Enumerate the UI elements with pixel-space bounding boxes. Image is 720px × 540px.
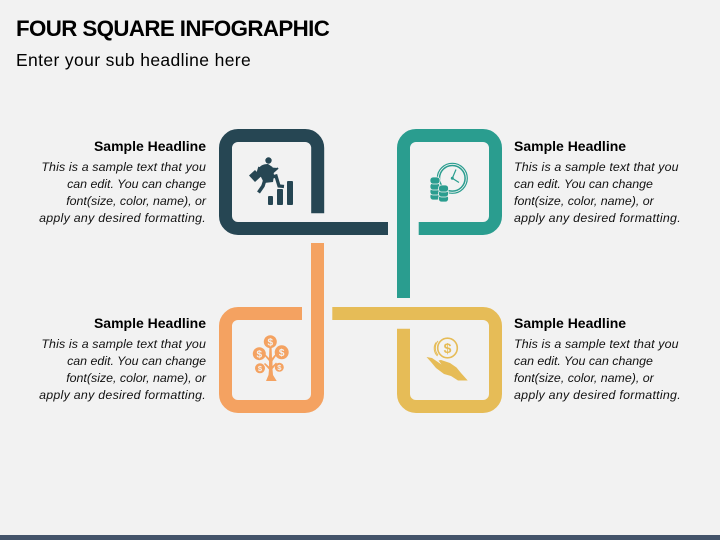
text block: bottom left: apply any desired formatting. xyxy=(39,388,206,402)
text block: bottom left: font(size, color, name), or xyxy=(66,370,206,384)
text block: bottom right: font(size, color, name), or xyxy=(514,370,654,384)
text block: bottom right: can edit. You can change xyxy=(514,354,653,368)
text block: bottom left: This is a sample text that you xyxy=(41,336,206,350)
text block: top right xyxy=(514,138,681,224)
panel: dark square outline xyxy=(226,136,388,228)
text block: top left: Sample Headline xyxy=(94,138,206,154)
text block: top right: apply any desired formatting. xyxy=(514,210,681,224)
icon: money tree: $ xyxy=(268,338,274,348)
text block: top left xyxy=(39,138,206,224)
text block: bottom left: Sample Headline xyxy=(94,315,206,331)
text block: bottom right: Sample Headline xyxy=(514,315,626,331)
text block: top left: This is a sample text that you xyxy=(41,160,206,174)
text block: bottom right: This is a sample text that you xyxy=(514,336,679,350)
icon: businessman climbing bars xyxy=(249,157,293,205)
text block: top right: font(size, color, name), or xyxy=(514,194,654,208)
text block: bottom left xyxy=(39,315,206,402)
panel: teal square outline xyxy=(404,136,496,298)
icon: hand holding coin: $ xyxy=(444,340,452,356)
panel: orange square outline xyxy=(226,243,318,406)
icon: clock and coins xyxy=(430,163,467,202)
text block: top right: Sample Headline xyxy=(514,138,626,154)
icon: money tree: $ xyxy=(257,350,263,360)
text block: top right: This is a sample text that you xyxy=(514,160,679,174)
icon: money tree: $ xyxy=(258,364,263,373)
text block: bottom right xyxy=(514,315,681,402)
text block: bottom right: apply any desired formatting. xyxy=(514,388,681,402)
title: FOUR SQUARE INFOGRAPHIC xyxy=(16,16,329,41)
icon: money tree xyxy=(253,335,289,381)
text block: top left: font(size, color, name), or xyxy=(66,194,206,208)
icon: money tree: $ xyxy=(279,348,285,359)
icon: hand holding coin xyxy=(426,338,468,380)
text block: top left: can edit. You can change xyxy=(67,176,206,190)
subtitle: Enter your sub headline here xyxy=(16,50,251,70)
text block: bottom left: can edit. You can change xyxy=(67,354,206,368)
panel: yellow square outline xyxy=(332,314,496,406)
icon: money tree: $ xyxy=(277,363,282,372)
footer bar xyxy=(0,535,720,540)
text block: top left: apply any desired formatting. xyxy=(39,210,206,224)
text block: top right: can edit. You can change xyxy=(514,176,653,190)
